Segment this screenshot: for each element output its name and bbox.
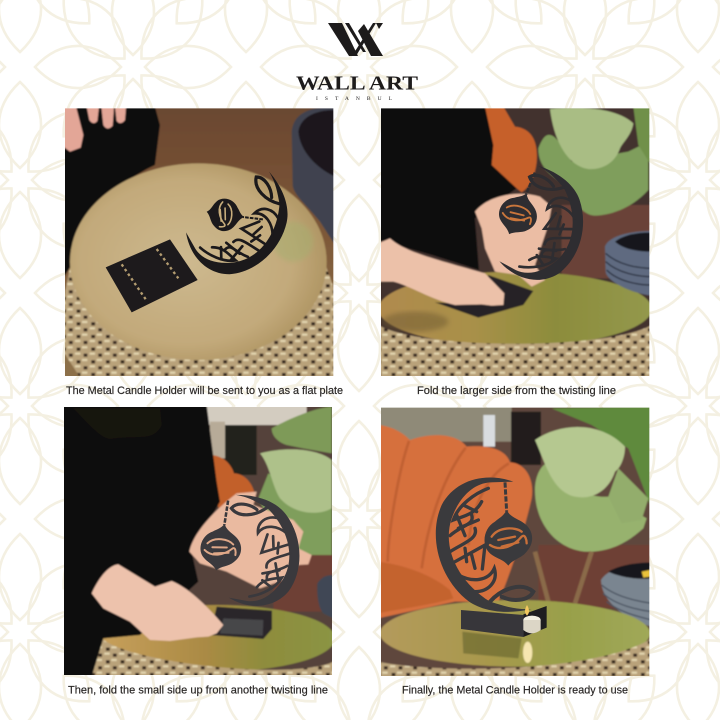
step 2 caption: Fold the larger side from the twisting line [417,385,616,397]
pale table edge behind [207,405,307,425]
lantern on palm [499,172,537,234]
flat crescent [186,172,288,274]
hanging lantern [196,497,251,575]
mesh table side [90,635,333,677]
step 3 caption: Then, fold the small side up from another twisting line [68,684,328,696]
orange sofa [210,455,255,512]
orange sofa backing [378,425,532,618]
folded stand [210,607,272,639]
large lower leaf [535,463,647,552]
mesh table side [378,325,652,377]
finished crescent [436,478,533,612]
person in black [62,405,220,677]
light green leaf [550,108,633,169]
table top [98,605,335,672]
shelf glow [378,405,512,442]
forearm and pressing hand [378,238,504,306]
stem and right leaves [633,107,650,163]
dark window [225,425,257,475]
right leaf [608,468,648,523]
candle holder stand [461,606,547,637]
candle reflection [523,642,532,663]
panel: step 1 photo, flat plate on table [63,107,335,377]
dim room background [381,108,650,340]
mesh table side [63,258,335,377]
stand shadow on table [462,632,522,658]
step 4 caption: Finally, the Metal Candle Holder is ready to use [402,684,628,696]
sofa seat [378,562,453,613]
striped pot [601,562,652,627]
brassy highlight [382,312,448,332]
person in black [378,107,517,270]
pot [317,575,333,618]
table mesh rim [378,638,652,678]
flat metal base plate [106,239,198,312]
hair [73,408,162,439]
dark leaf top right [272,407,332,453]
folded base plate [435,275,533,318]
icon: WM monogram [328,23,383,56]
striped pot [605,231,652,296]
brand logo [296,23,419,102]
light green leaf [260,449,332,513]
lantern lying flat [206,198,263,232]
floor background [65,108,334,298]
gold-green table top [378,272,652,346]
brick wall [538,545,652,608]
stand inner face [220,618,263,636]
panel: step 4 photo, finished holder [378,405,652,678]
ceramic pot [292,107,335,245]
crescent held in palm [500,166,584,280]
fingers [63,107,126,152]
step 1 caption: The Metal Candle Holder will be sent to you as a flat plate [66,385,343,397]
plant stems [535,552,592,603]
sofa petal shadows [388,441,509,568]
logo tagline: ISTANBUL [316,96,393,102]
dark leaf low [258,473,332,555]
light top leaf [535,427,625,497]
pale post [210,422,225,458]
logo wordmark: WALL ART [296,72,419,94]
gold table top [70,163,327,360]
holding palm [189,492,312,588]
blurred room background [378,405,652,678]
room background [188,407,332,671]
seated person in black [63,107,160,278]
floor corner [65,352,80,376]
dark doorway [511,412,541,465]
panel: step 3 photo, folding the small side [62,405,335,677]
orange sofa [485,107,537,192]
brick wall [562,205,652,278]
holding palm [475,194,552,287]
top leaves [552,407,650,505]
forearm and folding hand [92,564,223,641]
upright crescent in hand [212,492,311,614]
brick lower right [273,555,335,612]
tealight candle [523,605,541,633]
hanging lantern [485,482,532,566]
bright window spot [483,415,495,447]
panel: step 2 photo, folding the larger side [378,107,652,377]
dark green leaf mass [538,135,648,216]
green sheen [275,222,310,262]
table top [380,600,650,667]
